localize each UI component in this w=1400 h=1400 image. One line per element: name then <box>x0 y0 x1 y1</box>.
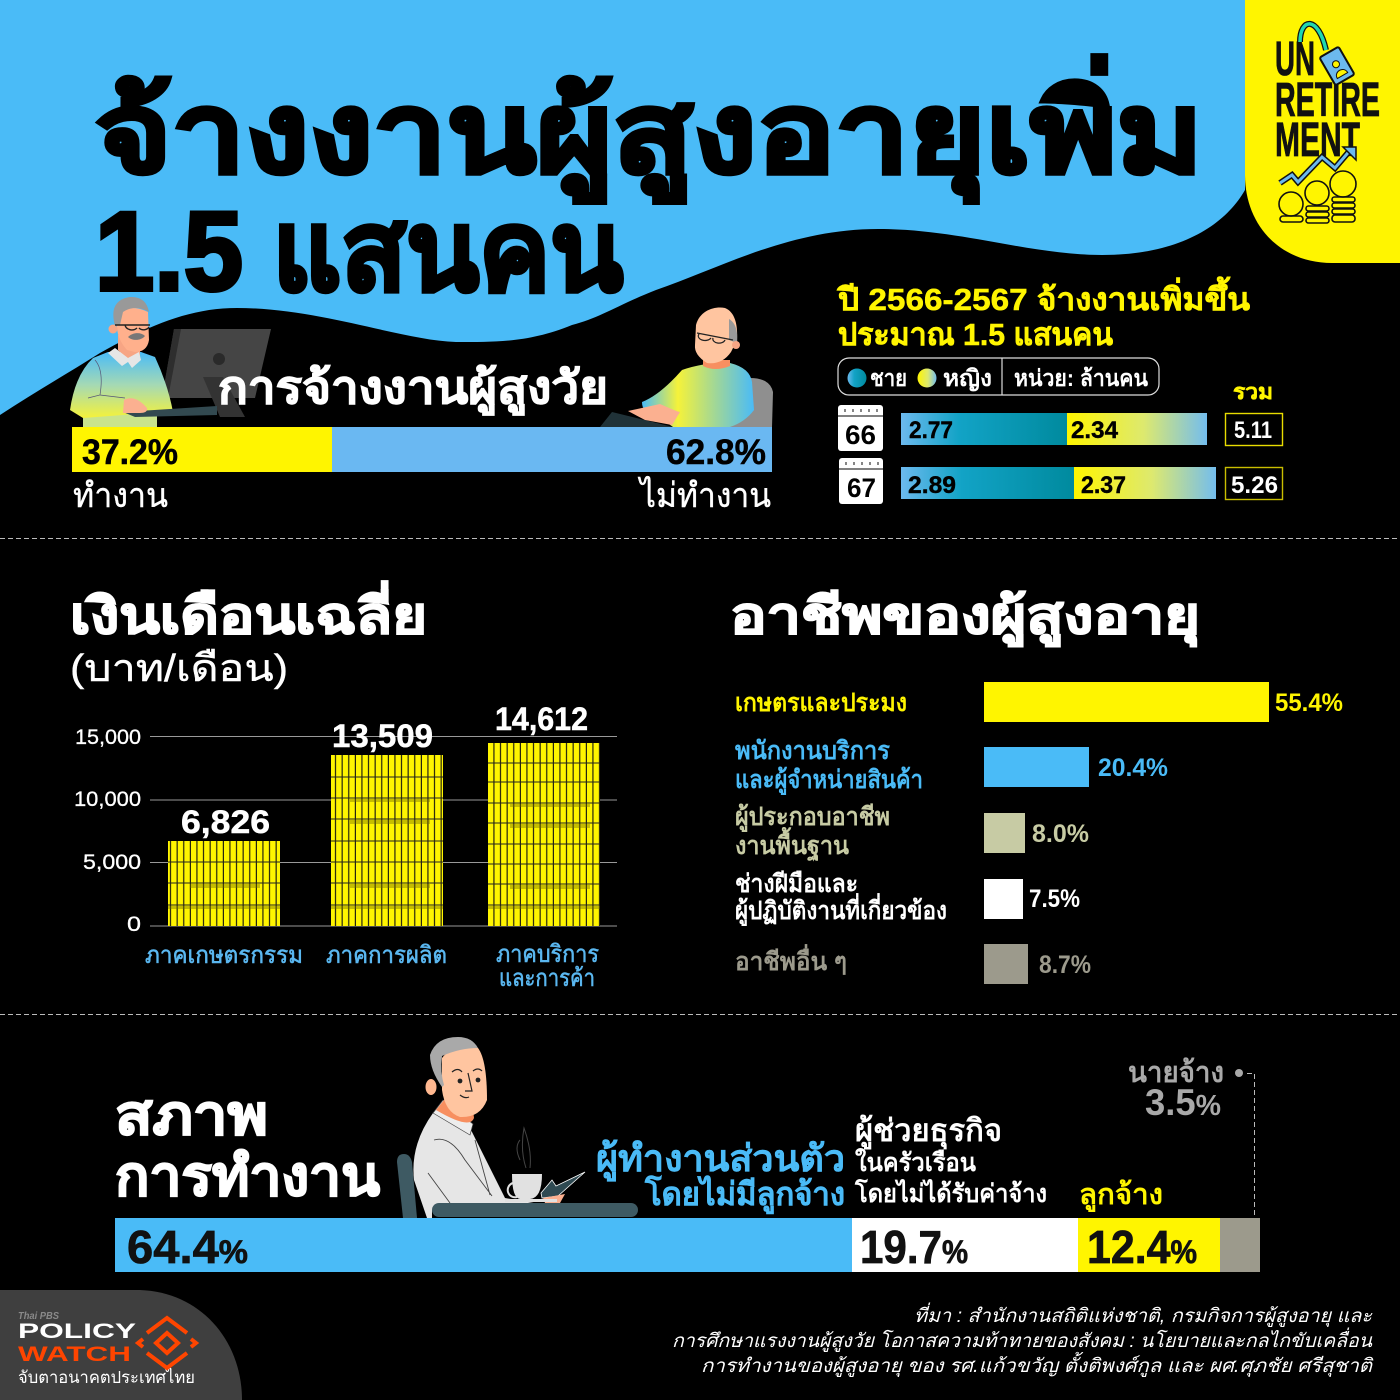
heading: work status: สภาพ <box>115 1084 268 1146</box>
label: employer callout: นายจ้าง <box>1128 1057 1224 1089</box>
policy watch logo panel <box>0 1290 242 1400</box>
craft workers: ผู้ปฏิบัติงานที่เกี่ยวข้อง <box>735 893 947 927</box>
heading: work status: การทำงาน <box>115 1145 380 1207</box>
year 67 row: 2.37 <box>1081 472 1126 499</box>
category labels: และการค้า <box>499 965 595 992</box>
bar: manufacturing <box>331 755 443 926</box>
value: not working: 62.8% <box>666 433 766 472</box>
work status stacked bar <box>115 1218 1260 1273</box>
label: own account <box>596 1138 845 1215</box>
main title <box>95 54 1203 314</box>
illustration: man at computer <box>70 297 271 427</box>
label: family helper: โดยไม่ได้รับค่าจ้าง <box>854 1178 1047 1208</box>
year 67 row: 2.89 <box>908 472 956 499</box>
tag title <box>1275 33 1380 167</box>
icon: coin stacks <box>1279 171 1356 223</box>
work status stacked bar: 64.4% <box>127 1221 248 1273</box>
policy watch logo panel: WATCH <box>18 1343 131 1366</box>
year 66 row <box>838 405 1282 451</box>
elementary occupations: 8.0% <box>1032 820 1089 848</box>
other occupations: 8.7% <box>1039 951 1091 979</box>
year 67 row: 5.26 <box>1231 472 1278 499</box>
total label: รวม <box>1233 381 1273 404</box>
service and sales: พนักงานบริการ <box>735 737 891 765</box>
yearly heading <box>837 276 1250 352</box>
values: 14,612 <box>495 701 588 737</box>
craft workers: ช่างฝีมือและ <box>735 870 858 898</box>
label: employer callout <box>1128 1057 1254 1216</box>
work status stacked bar: 19.7% <box>860 1221 968 1273</box>
craft workers <box>735 870 1080 927</box>
elementary occupations: ผู้ประกอบอาชีพ <box>735 803 890 833</box>
agriculture and fishery <box>735 682 1343 722</box>
label: employee: ลูกจ้าง <box>1079 1179 1163 1212</box>
icon: calendar 67 <box>839 458 883 504</box>
main title: 1.5 แสนคน <box>95 189 623 314</box>
icon: calendar 66 <box>838 405 883 451</box>
label: own account: ผู้ทำงานส่วนตัว <box>596 1138 845 1182</box>
category labels: ภาคเกษตรกรรม <box>145 942 303 969</box>
legend: ชาย <box>870 365 907 391</box>
heading: occupations: อาชีพของผู้สูงอายุ <box>730 588 1200 647</box>
label: family helper: ในครัวเรือน <box>855 1147 976 1177</box>
salary bar chart <box>74 701 617 992</box>
work status labels <box>596 1057 1254 1216</box>
legend <box>838 358 1159 395</box>
employment share bar <box>72 427 772 515</box>
agriculture and fishery: 55.4% <box>1275 689 1343 717</box>
heading: average salary: (บาท/เดือน) <box>70 648 288 690</box>
heading: average salary <box>70 581 427 690</box>
yellow series tag <box>1245 0 1400 263</box>
craft workers: 7.5% <box>1029 885 1080 913</box>
axis labels: 15,000 <box>75 726 141 749</box>
heading: work status <box>115 1084 380 1207</box>
main title: จ้างงานผู้สูงอายุเพิ่ม <box>95 54 1203 204</box>
year 66 row: 2.34 <box>1071 417 1119 444</box>
axis labels: 10,000 <box>74 788 141 811</box>
year 66 row: 5.11 <box>1234 417 1272 444</box>
year 67 row <box>839 458 1282 504</box>
axis labels: 0 <box>127 913 141 936</box>
label: working: ทำงาน <box>73 477 168 515</box>
occupation bars <box>735 682 1343 984</box>
values <box>181 701 588 840</box>
legend: หน่วย: ล้านคน <box>1014 365 1148 391</box>
service and sales <box>735 737 1168 796</box>
section heading: employment of elderly: การจ้างงานผู้สูงวัย <box>218 362 608 416</box>
label: family helper: ผู้ช่วยธุรกิจ <box>855 1113 1002 1150</box>
icon: calendar 67: 67 <box>847 473 876 503</box>
source note: การทำงานของผู้สูงอายุ ของ รศ.แก้วขวัญ ตั้งติพงศ์กูล และ ผศ.ศุภชัย ศรีสุชาติ <box>701 1351 1374 1377</box>
year 66 row: 2.77 <box>909 417 953 444</box>
elementary occupations <box>735 803 1089 862</box>
label: own account: โดยไม่มีลูกจ้าง <box>644 1175 845 1215</box>
values: 6,826 <box>181 804 270 840</box>
bar: services <box>488 743 600 926</box>
other occupations: อาชีพอื่น ๆ <box>735 944 847 976</box>
policy watch logo panel: Thai PBS <box>18 1311 59 1322</box>
icon: diamond logo <box>138 1318 196 1368</box>
source note: การศึกษาแรงงานผู้สูงวัย โอกาสความท้าทายของสังคม : นโยบายและกลไกขับเคลื่อน <box>672 1327 1373 1352</box>
label: not working: ไม่ทำงาน <box>637 476 771 515</box>
source note <box>672 1302 1374 1377</box>
label: family helper <box>854 1113 1047 1208</box>
icon: lanyard and ID card <box>1300 24 1355 85</box>
yearly heading: ปี 2566-2567 จ้างงานเพิ่มขึ้น <box>837 276 1250 317</box>
axis labels: 5,000 <box>83 851 141 874</box>
illustration: seated man <box>600 308 773 427</box>
label: employer callout: 3.5% <box>1145 1082 1221 1123</box>
working share <box>72 427 332 472</box>
elementary occupations: งานพื้นฐาน <box>735 826 849 862</box>
service and sales: และผู้จำหน่ายสินค้า <box>735 766 923 796</box>
policy watch logo panel: จับตาอนาคตประเทศไทย <box>18 1367 195 1387</box>
policy watch logo panel: POLICY <box>18 1320 136 1343</box>
value: working: 37.2% <box>82 433 178 472</box>
work status stacked bar: 12.4% <box>1087 1221 1197 1273</box>
axis labels <box>74 726 141 936</box>
bar: agriculture <box>168 841 280 926</box>
category labels: ภาคการผลิต <box>326 942 447 969</box>
heading: average salary: เงินเดือนเฉลี่ย <box>70 581 427 644</box>
icon: rising arrow <box>1280 147 1356 183</box>
category labels: ภาคบริการ <box>496 941 599 968</box>
agriculture and fishery: เกษตรและประมง <box>735 689 907 717</box>
other occupations <box>735 944 1091 984</box>
yearly heading: ประมาณ 1.5 แสนคน <box>838 317 1113 352</box>
illustration: man with coffee <box>397 1037 638 1218</box>
legend: หญิง <box>943 365 992 392</box>
blue wave header <box>0 0 1245 415</box>
icon: calendar 66: 66 <box>845 420 876 450</box>
not working share <box>332 427 772 472</box>
service and sales: 20.4% <box>1098 754 1168 782</box>
category labels <box>145 941 599 992</box>
values: 13,509 <box>332 718 433 754</box>
tag title: UN <box>1275 33 1315 86</box>
source note: ที่มา : สำนักงานสถิติแห่งชาติ, กรมกิจการผู้สูงอายุ และ <box>914 1302 1373 1327</box>
